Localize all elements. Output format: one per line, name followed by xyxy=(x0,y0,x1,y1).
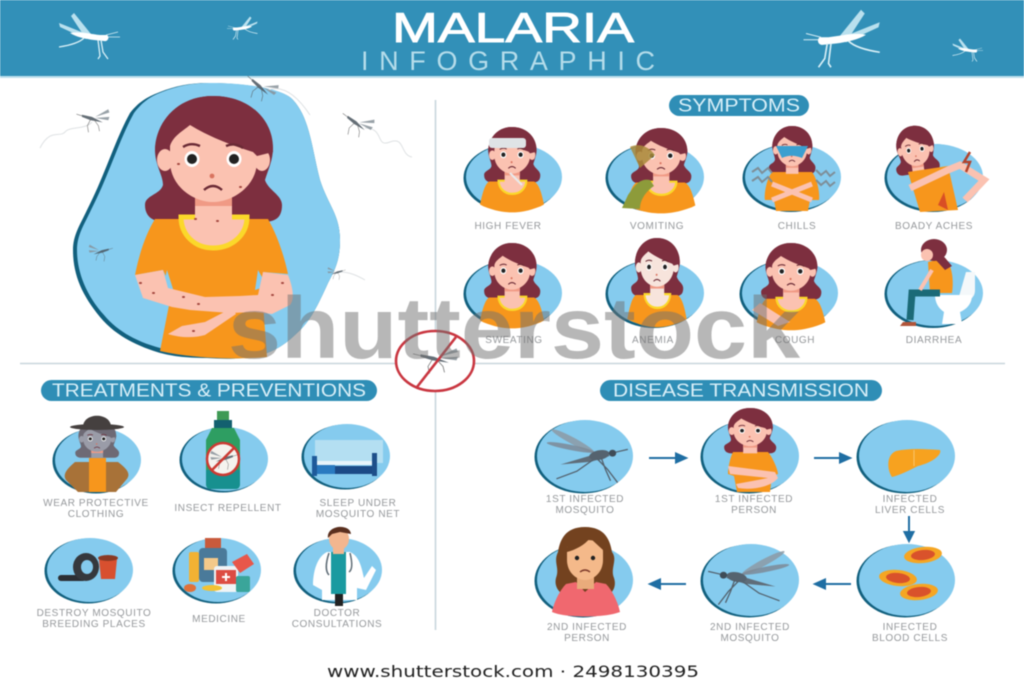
blob edge xyxy=(73,83,340,359)
step: infected liver cells xyxy=(856,420,955,516)
treatment: insect repellent: INSECT REPELLENT xyxy=(174,503,282,514)
symptom: anemia: ANEMIA xyxy=(632,335,674,346)
symptom: vomiting xyxy=(606,128,704,232)
icon: mosquito xyxy=(328,267,346,280)
treatment: doctor consultations: CONSULTATIONS xyxy=(292,619,382,630)
icon: header mosquito small right xyxy=(952,38,983,62)
step: infected blood cells xyxy=(856,544,955,644)
arrow xyxy=(650,580,686,588)
footer stock id: www.shutterstock.com · 2498130395 xyxy=(327,662,699,681)
symptom: sweating: SWEATING xyxy=(485,335,543,346)
treatment: mosquito net: MOSQUITO NET xyxy=(316,509,400,520)
icon: header mosquito right xyxy=(804,10,880,67)
symptom: cough: COUGH xyxy=(775,335,815,346)
symptom: vomiting: VOMITING xyxy=(630,221,684,232)
step: first infected mosquito: 1ST INFECTED xyxy=(546,494,624,505)
mosquito trail lines xyxy=(40,89,412,280)
arrow xyxy=(815,580,851,588)
symptom: chills xyxy=(742,126,841,232)
treatment: destroy breeding places xyxy=(37,538,151,630)
woman neck and chest xyxy=(181,217,247,248)
symptom: anemia xyxy=(606,238,704,346)
arrow xyxy=(814,454,850,462)
icon: mosquito xyxy=(240,72,280,106)
arrow xyxy=(649,454,686,462)
arrow xyxy=(904,516,914,541)
step: second infected person: 2ND INFECTED xyxy=(547,622,627,633)
woman forearm and hand xyxy=(168,308,236,337)
skin spots xyxy=(140,164,283,331)
symptom: diarrhea: DIARRHEA xyxy=(906,335,962,346)
treatment: insect repellent xyxy=(174,411,282,514)
treatment: doctor consultations: DOCTOR xyxy=(314,608,360,619)
treatment: doctor consultations xyxy=(292,527,382,630)
heading: treatments: TREATMENTS & PREVENTIONS xyxy=(52,380,366,400)
heading: symptoms: SYMPTOMS xyxy=(678,96,800,116)
step: second infected mosquito xyxy=(700,544,799,644)
treatment: destroy breeding places: DESTROY MOSQUITO xyxy=(37,608,151,619)
treatment: protective clothing: WEAR PROTECTIVE xyxy=(43,498,149,509)
subtitle: INFOGRAPHIC xyxy=(361,46,655,76)
step: first infected person: 1ST INFECTED xyxy=(715,494,793,505)
icon: mosquito xyxy=(337,109,375,142)
header banner xyxy=(0,0,1024,78)
treatment: protective clothing xyxy=(43,416,149,520)
treatment: destroy breeding places: BREEDING PLACES xyxy=(42,619,146,630)
symptom: high fever: HIGH FEVER xyxy=(474,221,542,232)
step: infected blood cells: BLOOD CELLS xyxy=(872,633,948,644)
treatment: mosquito net xyxy=(302,424,400,520)
symptom: body aches xyxy=(884,123,984,232)
treatment: mosquito net: SLEEP UNDER xyxy=(320,498,396,509)
step: second infected person: PERSON xyxy=(564,633,610,644)
symptom: body aches: BOADY ACHES xyxy=(895,221,973,232)
step: second infected mosquito: 2ND INFECTED xyxy=(710,622,790,633)
arm gaps xyxy=(163,270,267,292)
symptom: diarrhea xyxy=(884,239,983,346)
woman shirt xyxy=(135,219,288,358)
watermark: shutterstock xyxy=(228,280,801,377)
woman arms xyxy=(135,270,293,314)
panel: treatments and preventions xyxy=(37,380,400,630)
blob fill xyxy=(77,83,340,357)
icon: header mosquito small left xyxy=(227,16,258,40)
panel: disease transmission xyxy=(534,380,955,644)
step: second infected mosquito: MOSQUITO xyxy=(720,633,780,644)
panel: symptoms xyxy=(464,95,984,346)
treatment: medicine: MEDICINE xyxy=(192,614,246,625)
symptom: chills: CHILLS xyxy=(778,221,816,232)
step: infected liver cells: LIVER CELLS xyxy=(875,505,945,516)
title: MALARIA xyxy=(392,4,634,51)
icon: mosquito xyxy=(76,109,109,132)
section dividers xyxy=(20,100,1005,630)
step: first infected mosquito: MOSQUITO xyxy=(555,505,615,516)
symptom: sweating xyxy=(464,243,562,346)
step: second infected person xyxy=(534,527,633,644)
hero illustration: sick woman xyxy=(40,72,412,359)
icon: mosquito xyxy=(89,245,113,261)
woman hair xyxy=(145,96,282,222)
step: first infected person xyxy=(700,408,799,516)
heading: transmission: DISEASE TRANSMISSION xyxy=(613,380,869,400)
woman head xyxy=(155,96,273,222)
treatment: protective clothing: CLOTHING xyxy=(68,509,124,520)
step: infected blood cells: INFECTED xyxy=(883,622,937,633)
step: first infected person: PERSON xyxy=(731,505,777,516)
heading: symptoms xyxy=(669,95,809,116)
icon: no mosquito sign xyxy=(396,331,474,391)
treatment: medicine xyxy=(172,538,261,625)
symptom: high fever xyxy=(464,127,562,232)
step: first infected mosquito xyxy=(534,420,633,516)
symptom: cough xyxy=(740,243,838,346)
icon: header mosquito left xyxy=(59,13,120,59)
step: infected liver cells: INFECTED xyxy=(883,494,937,505)
